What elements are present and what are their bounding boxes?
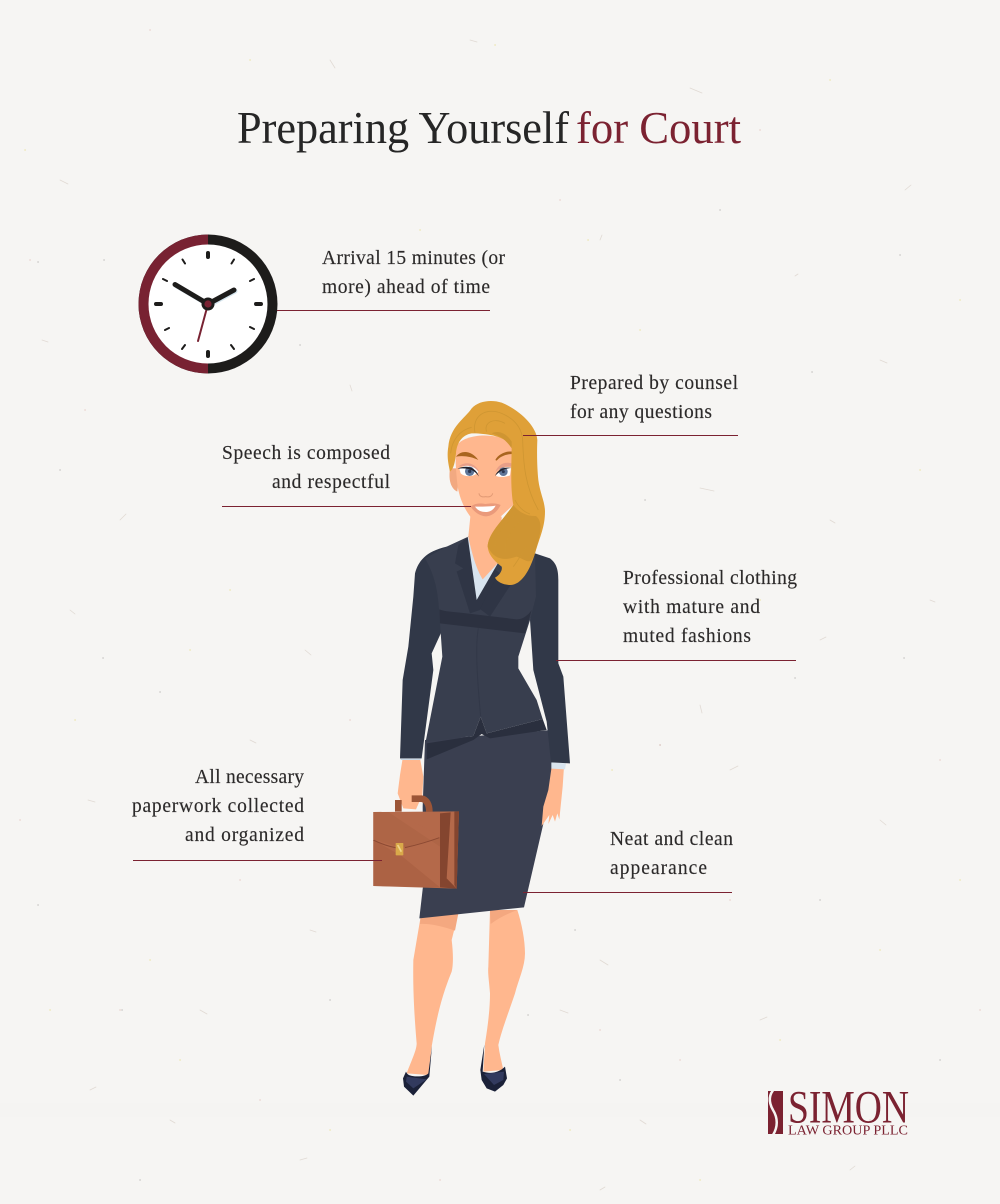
skirt — [419, 730, 553, 918]
jacket — [400, 537, 570, 769]
logo: LAW GROUP PLLC — [788, 1124, 908, 1138]
eyes — [457, 463, 512, 477]
title — [237, 102, 741, 153]
label: paperwork: paperwork collected — [132, 796, 304, 817]
shirt and neck — [468, 513, 502, 600]
label: clothing: Professional clothing — [623, 568, 797, 589]
label: clothing: with mature and — [623, 597, 760, 618]
title: Preparing Yourself — [237, 102, 570, 153]
label: speech: Speech is composed — [222, 443, 390, 464]
label: paperwork: All necessary — [195, 767, 304, 788]
label: speech: and respectful — [272, 472, 391, 493]
label: arrival — [277, 248, 506, 310]
label: clothing: muted fashions — [623, 626, 751, 647]
label: prepared by counsel: Prepared by counsel — [570, 373, 739, 394]
logo: SIMON — [788, 1082, 909, 1134]
icon: clock — [138, 234, 278, 374]
label: paperwork: and organized — [185, 825, 304, 846]
eyebrows — [456, 451, 513, 461]
mouth — [471, 503, 501, 516]
nose — [479, 493, 493, 497]
label: appearance: Neat and clean — [610, 829, 733, 850]
label: prepared by counsel — [523, 373, 739, 436]
head — [448, 401, 545, 585]
label: prepared by counsel: for any questions — [570, 402, 712, 423]
hands — [398, 758, 564, 826]
label: paperwork — [132, 767, 382, 860]
label: arrival: Arrival 15 minutes (or — [322, 248, 506, 269]
label: appearance: appearance — [610, 858, 707, 879]
icon: briefcase — [373, 799, 459, 889]
label: arrival: more) ahead of time — [322, 277, 490, 298]
shoes — [403, 1044, 507, 1096]
label: clothing — [556, 568, 797, 660]
woman figure — [398, 401, 570, 1096]
logo — [768, 1082, 909, 1138]
label: appearance — [523, 829, 733, 892]
title: for Court — [576, 102, 741, 153]
legs — [407, 910, 525, 1075]
hair — [448, 401, 545, 585]
label: speech — [222, 443, 471, 506]
